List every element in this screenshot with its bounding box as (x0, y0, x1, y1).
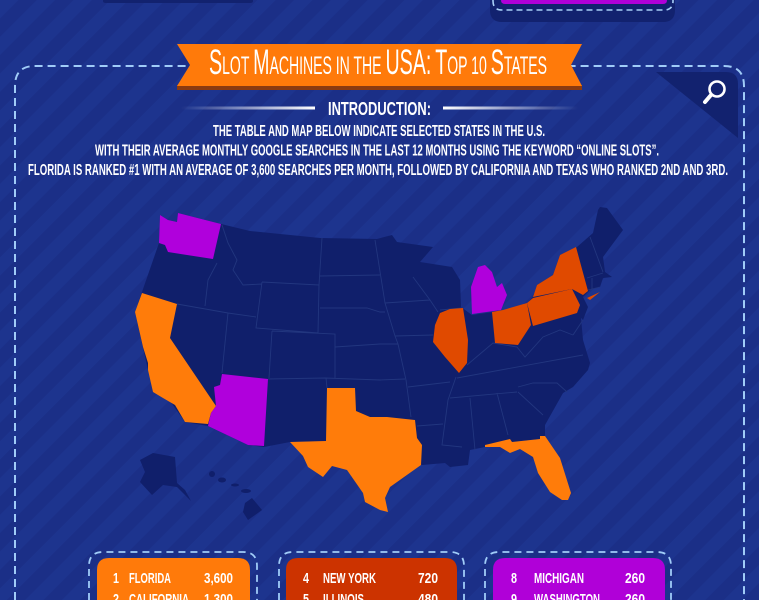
text block: introduction copy: THE TABLE AND MAP BELOW INDICATE SELECTED STATES IN THE U.S. (213, 123, 545, 140)
table: ranks 4-7, red: 4 (303, 570, 309, 587)
title: SLOT MACHINES IN THE USA: TOP 10 STATES (209, 43, 547, 82)
table: ranks 8-10, purple: MICHIGAN (534, 570, 584, 587)
map: contiguous US base (135, 207, 623, 467)
table: ranks 1-3, orange: 3,600 (204, 570, 233, 587)
corner fold with magnifier icon (656, 72, 738, 138)
state: New York (533, 247, 588, 297)
table: ranks 8-10, purple: 260 (625, 570, 645, 587)
state: Washington (159, 213, 221, 259)
state: Florida (485, 436, 571, 500)
text block: introduction copy (28, 123, 728, 179)
table: ranks 4-7, red: 720 (418, 570, 438, 587)
state: Ohio (492, 303, 531, 345)
table: ranks 8-10, purple: 8 (511, 570, 517, 587)
state: Texas (290, 388, 422, 512)
table: ranks 4-7, red (279, 552, 464, 600)
previous section: left table remnant (103, 0, 253, 3)
map: state borders (177, 225, 603, 450)
table: ranks 1-3, orange (89, 552, 257, 600)
table: ranks 1-3, orange: 1 (113, 570, 119, 587)
map: Alaska (140, 453, 191, 501)
previous section: right table remnant (490, 0, 675, 22)
heading: introduction: INTRODUCTION: (328, 99, 431, 119)
state: Illinois (433, 308, 468, 373)
title banner (177, 43, 582, 90)
table: ranks 1-3, orange: FLORIDA (129, 570, 171, 587)
US map (135, 207, 623, 520)
state: California (135, 293, 216, 424)
heading: introduction (181, 99, 578, 119)
icon: magnifying glass (705, 82, 724, 102)
map: Hawaii (209, 471, 262, 520)
state: Pennsylvania (527, 289, 580, 326)
state: Arizona (208, 374, 268, 446)
state: Long Island (587, 292, 600, 300)
table: ranks 4-7, red: NEW YORK (323, 570, 376, 587)
state: Michigan (471, 265, 507, 314)
table: ranks 8-10, purple (485, 552, 671, 600)
